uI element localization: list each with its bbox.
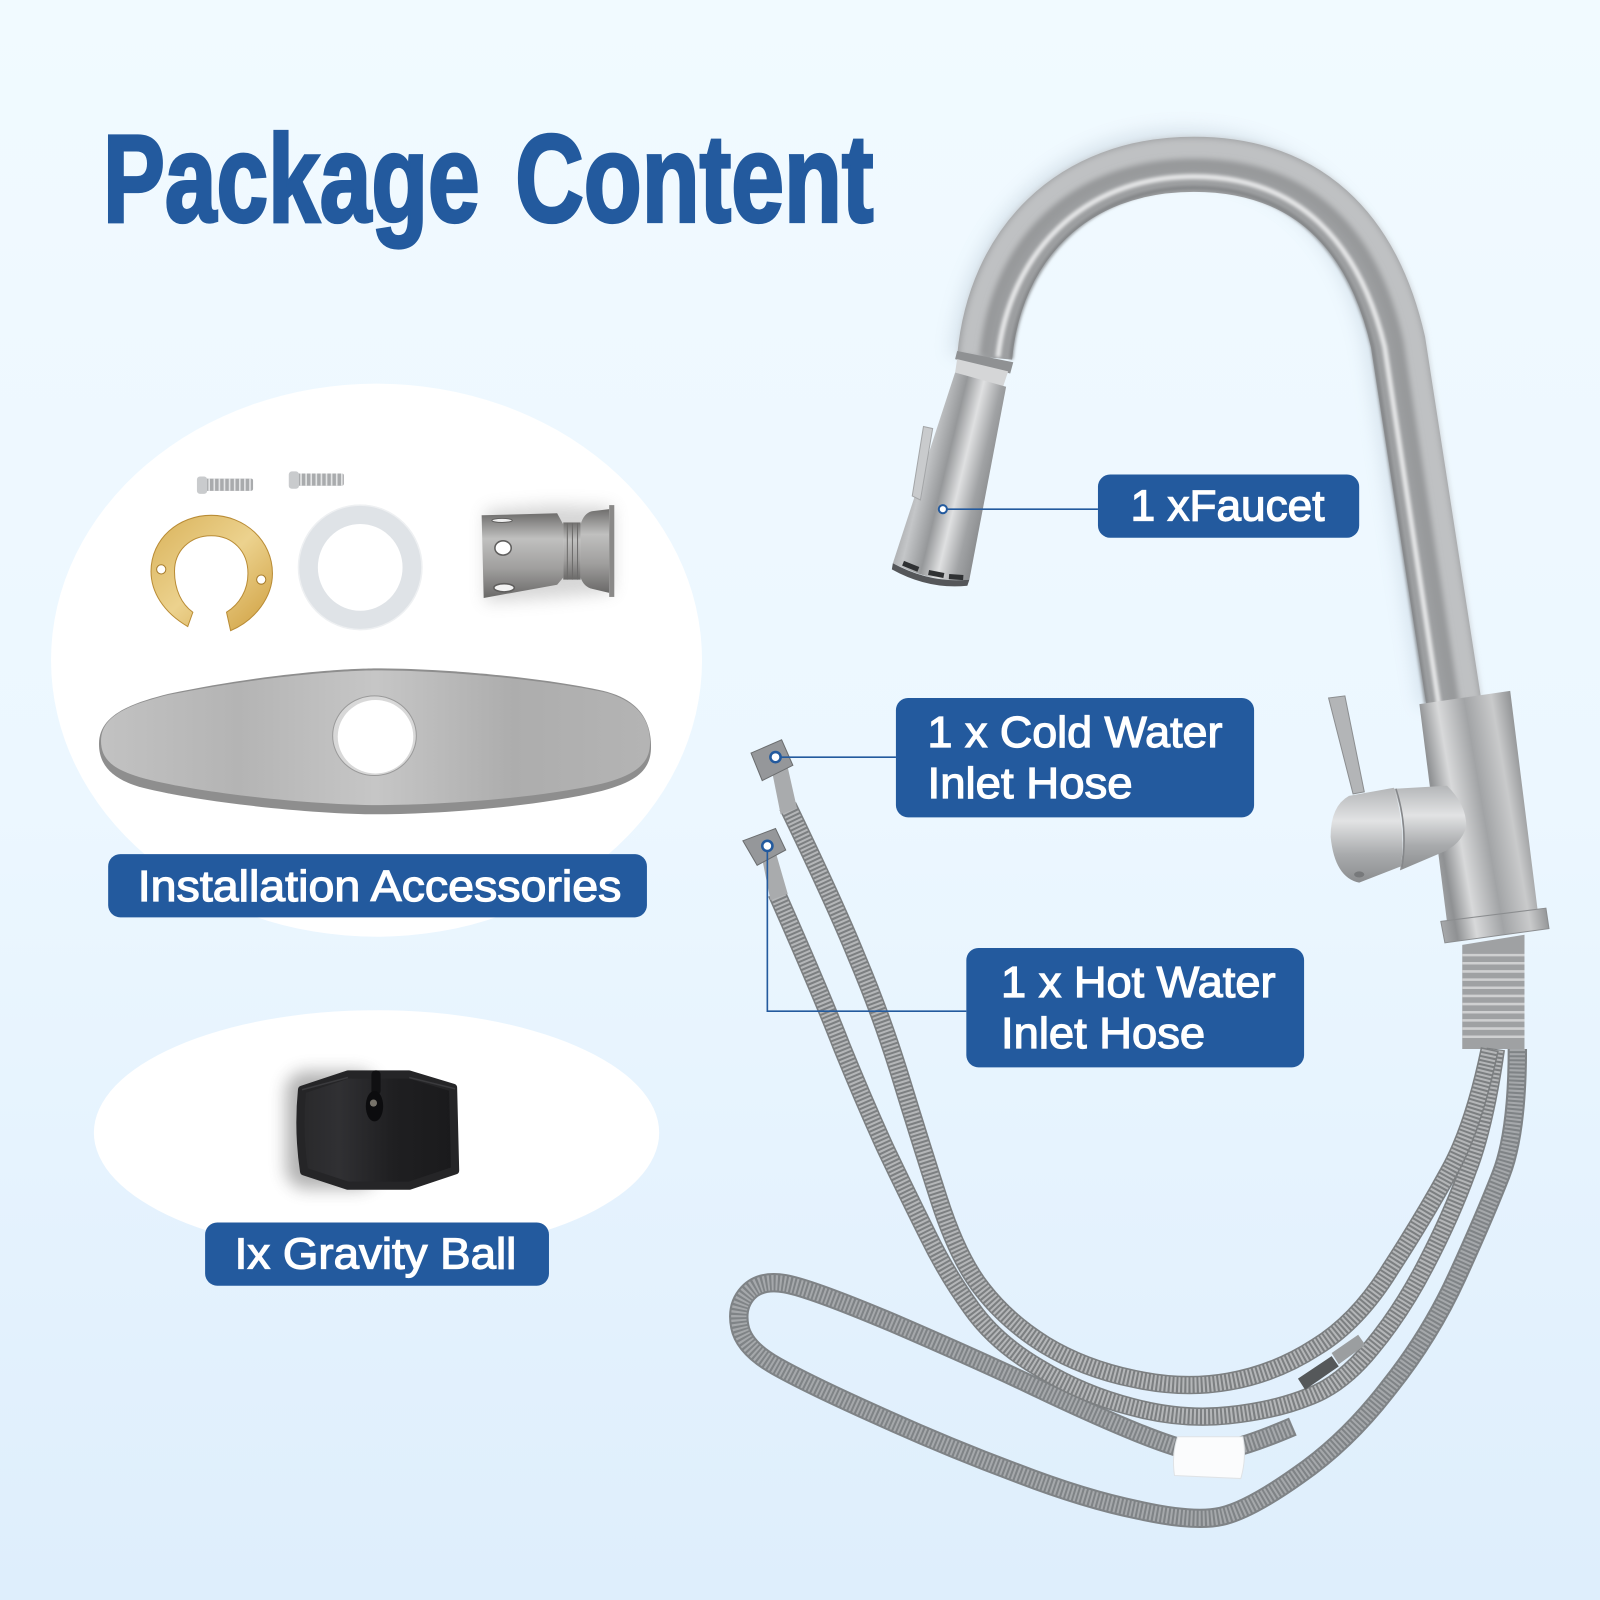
shadow [974, 153, 1444, 704]
spray head [892, 372, 1006, 586]
label: hot water hose: 1 x Hot Water [1001, 958, 1276, 1007]
icon: screw left [197, 477, 253, 494]
title: Package [103, 109, 480, 248]
icon: gold c-ring [151, 515, 272, 631]
label: cold water hose [896, 698, 1254, 817]
leader: hot hose [762, 841, 966, 1011]
icon: white washer [298, 505, 422, 630]
label: hot water hose: Inlet Hose [1001, 1009, 1205, 1058]
base body [1419, 691, 1538, 921]
leader: cold hose [770, 752, 896, 762]
icon: gravity ball [286, 1070, 455, 1189]
fitting: hot hose nut [743, 829, 788, 900]
hose: cold water inlet hose [788, 806, 1490, 1385]
label: hot water hose [966, 948, 1304, 1067]
panel: gravity ball [94, 1010, 659, 1255]
label: installation accessories: Installation Accessories [138, 862, 621, 911]
label: cold water hose: 1 x Cold Water [928, 708, 1222, 757]
connector on braided hoses [1298, 1335, 1365, 1390]
hose: pull-out braided hose [739, 1049, 1517, 1518]
spout [971, 150, 1468, 704]
handle body [1331, 786, 1466, 883]
leader: faucet [939, 505, 1098, 513]
label: gravity ball: Ix Gravity Ball [235, 1229, 516, 1278]
label: cold water hose: Inlet Hose [928, 759, 1133, 808]
icon: deck plate [99, 668, 651, 814]
icon: screw right [289, 471, 344, 489]
white clip [1173, 1437, 1244, 1479]
faucet [892, 150, 1549, 1049]
fitting: cold hose nut [751, 740, 797, 814]
flange [1441, 908, 1549, 943]
panel: installation accessories [51, 384, 702, 937]
collar [955, 351, 1013, 387]
label: gravity ball [205, 1222, 549, 1286]
label: installation accessories [108, 854, 647, 917]
hose: hot water inlet hose [777, 893, 1496, 1417]
label: faucet: 1 xFaucet [1131, 481, 1324, 530]
icon: metal nipple [482, 505, 614, 602]
label: faucet [1098, 474, 1359, 538]
title: Content [515, 109, 873, 248]
handle lever [1329, 696, 1364, 794]
threaded stem [1462, 935, 1524, 1049]
title [103, 109, 873, 248]
